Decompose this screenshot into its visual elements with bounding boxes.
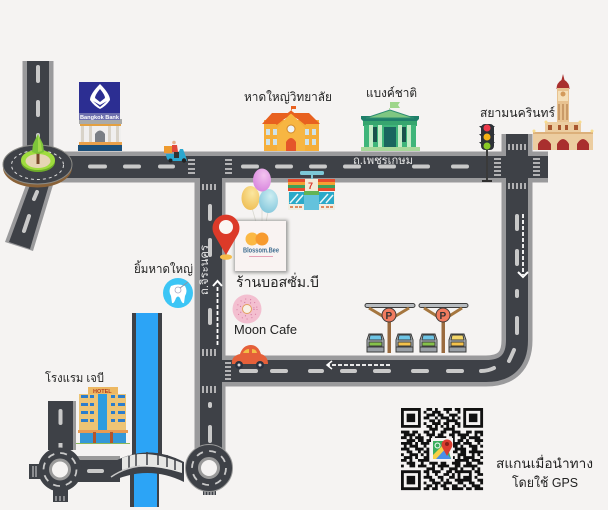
traffic light: [479, 124, 495, 182]
map pin: [213, 215, 240, 260]
icon: google maps logo: [431, 438, 453, 461]
label: dental clinic: ยิ้มหาดใหญ่: [134, 260, 193, 276]
caption: scan for navigation: [496, 455, 593, 490]
clock tower building: [532, 74, 594, 150]
label: hatyai college: หาดใหญ่วิทยาลัย: [244, 90, 332, 104]
hotel building: HOTEL: [93, 389, 112, 395]
qr code: [401, 408, 483, 490]
label: national bank: แบงค์ชาติ: [366, 86, 417, 100]
label: moon cafe: Moon Cafe: [234, 323, 297, 337]
red car: [232, 345, 268, 369]
river: [130, 313, 162, 507]
hotel building: [76, 387, 130, 444]
icon: donut: [232, 294, 262, 324]
label: hotel: โรงแรม เจบี: [45, 371, 104, 385]
shop card: blossom bee: Blossom.Bee: [243, 248, 279, 254]
road network: [5, 61, 548, 455]
delivery scooter: [164, 141, 187, 163]
parking lot: P: [440, 311, 446, 322]
label: shop name: ร้านบอสซั่ม.บี: [236, 273, 319, 290]
roundabout with tree: [3, 134, 72, 188]
route arrows: [213, 214, 528, 369]
national bank building: [361, 102, 420, 151]
bridge: [110, 452, 184, 482]
caption: scan for navigation: โดยใช้ GPS: [512, 475, 578, 490]
caption: scan for navigation: สแกนเมื่อนำทาง: [496, 455, 593, 471]
icon: dental tooth: [163, 278, 193, 308]
bangkok bank: Bangkok Bank: [80, 115, 120, 121]
right roundabout: [186, 444, 232, 495]
lower roads: [29, 401, 120, 502]
parking lot: [367, 306, 466, 353]
7-eleven store: 7: [308, 181, 313, 191]
label: siam nakarin: สยามนครินทร์: [480, 106, 556, 120]
bangkok bank: [78, 82, 122, 151]
parking lot: P: [386, 311, 392, 322]
7-eleven store: [288, 171, 335, 210]
college building: [262, 106, 320, 151]
balloons: [242, 168, 278, 222]
road label: phetkasem: ถ.เพชรเกษม: [353, 155, 413, 167]
shop card: blossom bee: [234, 220, 288, 273]
road label: chira nakhon: ถ.จิระนคร: [199, 245, 211, 295]
left roundabout: [38, 448, 82, 492]
